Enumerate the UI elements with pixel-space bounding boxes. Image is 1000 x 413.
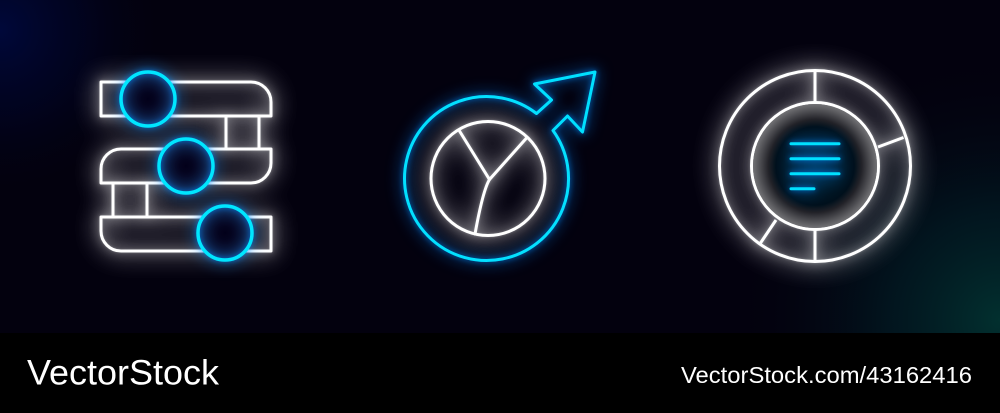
text lines: [791, 144, 839, 189]
donut rings and segment dividers: [720, 70, 910, 262]
icon: donut chart with text lines: [720, 70, 910, 262]
pie chart: [431, 122, 545, 236]
donut centre: [753, 104, 877, 228]
male symbol outline: [405, 72, 595, 261]
image id: VectorStock.com/43162416: [681, 362, 972, 388]
slider knobs: [121, 72, 252, 260]
slider bars: [101, 82, 271, 251]
icon: sliders: [101, 72, 271, 260]
brand wordmark: VectorStock: [27, 354, 220, 392]
icon: male symbol with pie chart: [405, 72, 595, 261]
footer band: [0, 333, 1000, 413]
